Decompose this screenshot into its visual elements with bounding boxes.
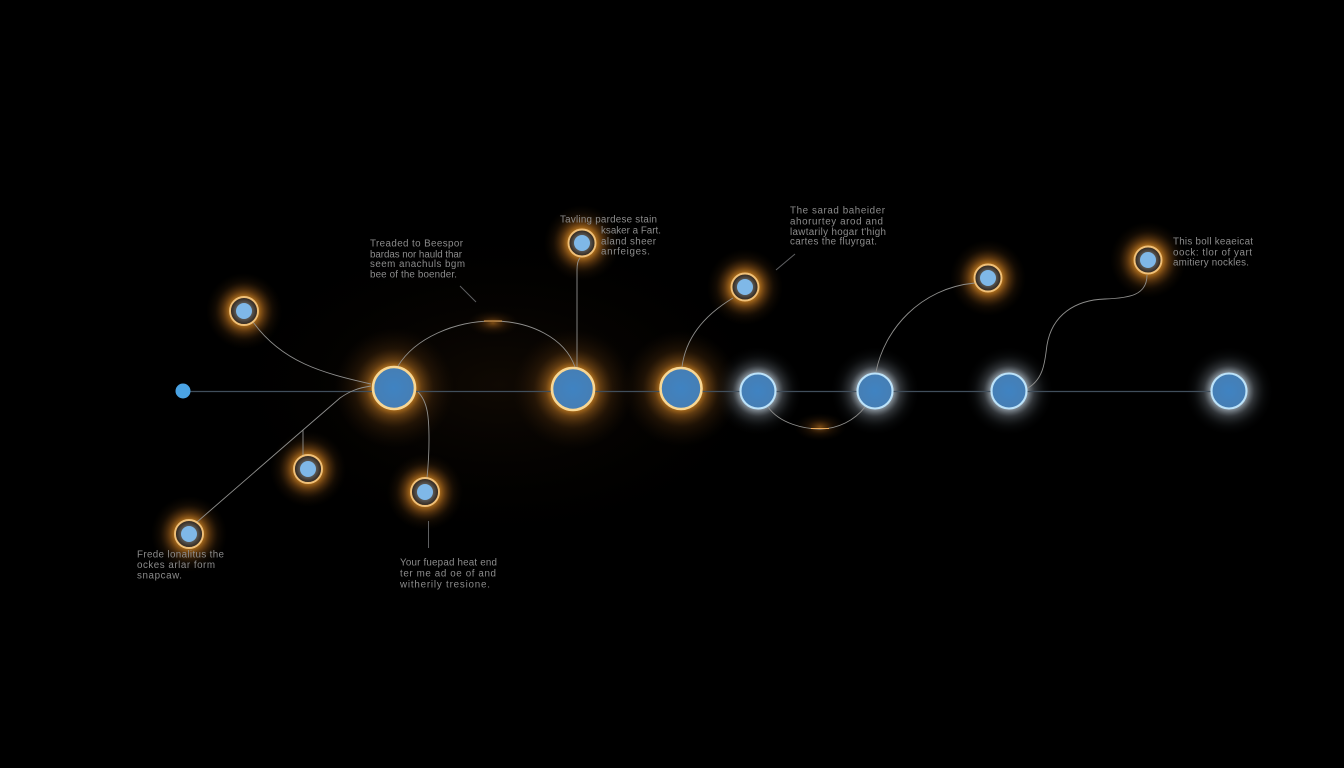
text block: upper left callout: bardas nor hauld thar bbox=[370, 250, 463, 260]
text block: lower middle callout bbox=[399, 558, 497, 590]
text block: lower middle callout: Your fuepad heat end bbox=[400, 558, 497, 568]
text block: upper middle callout: anrfeiges. bbox=[601, 246, 650, 258]
connector curves bbox=[197, 258, 1147, 522]
text block: lower left callout: snapcaw. bbox=[137, 570, 182, 582]
text block: upper left callout: Treaded to Beespor bbox=[370, 238, 464, 250]
callout leader ticks bbox=[428, 254, 795, 548]
text block: upper left callout: bee of the boender. bbox=[370, 270, 457, 280]
text block: upper middle callout: Tavling pardese stain bbox=[560, 214, 657, 226]
node glows bbox=[151, 205, 1273, 572]
timeline axis bbox=[183, 390, 1229, 392]
text block: upper right-middle callout: lawtarily hogar t'high bbox=[790, 227, 886, 238]
text block: upper middle callout: aland sheer bbox=[601, 236, 657, 248]
text block: upper left callout bbox=[370, 238, 465, 280]
text block: lower left callout: ockes arlar form bbox=[137, 560, 215, 571]
text block: lower middle callout: witherily tresione. bbox=[399, 580, 490, 590]
large orange nodes bbox=[373, 367, 702, 410]
text block: far right callout: This boll keaeicat bbox=[1173, 236, 1253, 248]
text block: lower middle callout: ter me ad oe of and bbox=[400, 568, 496, 580]
text block: upper right-middle callout: The sarad baheider bbox=[790, 206, 886, 216]
text block: far right callout: amitiery nockles. bbox=[1173, 258, 1249, 268]
text block: upper left callout: seem anachuls bgm bbox=[370, 259, 465, 270]
text block: far right callout: oock: tlor of yart bbox=[1173, 248, 1252, 258]
text block: upper middle callout: ksaker a Fart. bbox=[601, 226, 661, 236]
text block: lower left callout bbox=[137, 550, 225, 582]
blue nodes bbox=[740, 374, 1246, 408]
text block: upper right-middle callout: cartes the fluyrgat. bbox=[790, 236, 877, 248]
text block: upper right-middle callout: ahorurtey arod and bbox=[790, 216, 883, 228]
text block: upper right-middle callout bbox=[790, 206, 886, 248]
small branch nodes bbox=[175, 230, 1162, 548]
ambient warm haze bbox=[200, 215, 800, 555]
start dot bbox=[176, 384, 190, 398]
text block: far right callout bbox=[1173, 236, 1253, 268]
text block: lower left callout: Frede lonalitus the bbox=[137, 550, 225, 560]
text block: upper middle callout bbox=[560, 214, 661, 258]
